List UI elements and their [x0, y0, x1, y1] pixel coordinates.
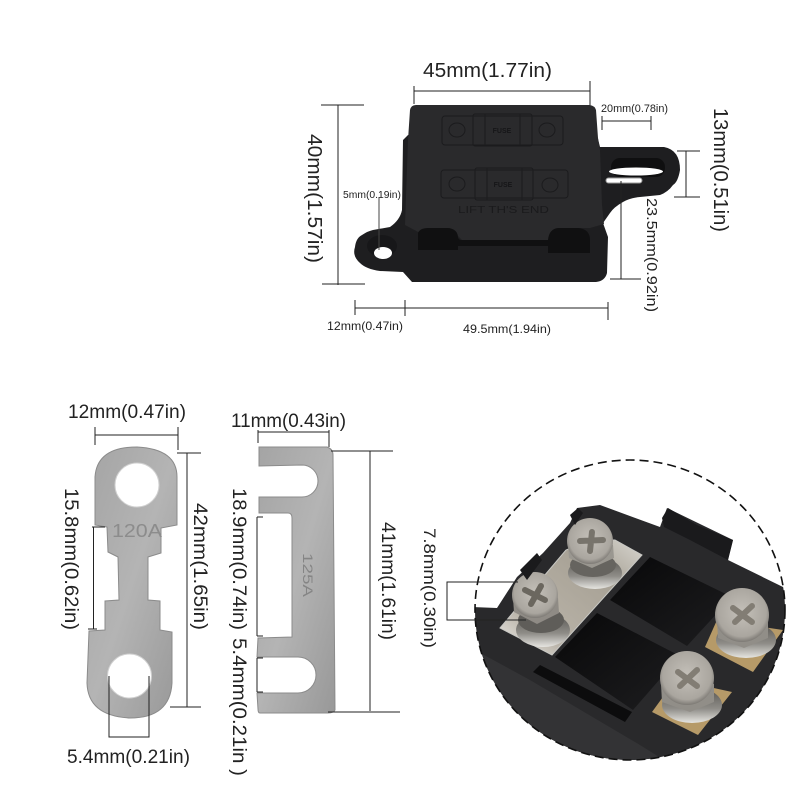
- label: FUSE lower: FUSE: [494, 182, 513, 189]
- right mounting slot: [611, 158, 665, 177]
- stamp 120A: 120A: [112, 521, 162, 541]
- dimension: 11mm fuse width: [231, 411, 346, 447]
- dimension: 18.9mm: 18.9mm(0.74in): [228, 488, 249, 630]
- dimension: 15.8mm: [60, 488, 105, 630]
- screw 1: [512, 572, 570, 647]
- dimension: 20mm slot: 20mm(0.78in): [601, 103, 668, 115]
- dimension: 45mm width: 45mm(1.77in): [423, 60, 552, 82]
- dimension: 23.5mm: 23.5mm(0.92in): [643, 198, 660, 312]
- left tab: [520, 553, 542, 580]
- dimension: 15.8mm: 15.8mm(0.62in): [60, 488, 81, 630]
- dimension: 42mm: [170, 453, 210, 707]
- box lid: [405, 105, 604, 240]
- dimension: 40mm height: [303, 105, 365, 285]
- left mounting hole: [374, 247, 392, 259]
- top-left tab: [570, 508, 583, 525]
- dimension: 42mm: 42mm(1.65in): [189, 503, 210, 630]
- clipped photo content: [475, 505, 785, 760]
- slot highlight: [606, 178, 642, 183]
- dimension: 18.9mm: [228, 488, 263, 636]
- dimension: 13mm ear: 13mm(0.51in): [709, 108, 731, 232]
- brass pad lower: [652, 685, 732, 735]
- top hole: [115, 463, 159, 507]
- dimension: 41mm: 41mm(1.61in): [377, 522, 398, 640]
- bottom hole: [108, 654, 152, 698]
- dimension: 5mm hole: 5mm(0.19in): [343, 190, 401, 201]
- dimension: 5mm hole: [343, 190, 401, 250]
- slot under plate: [533, 665, 632, 722]
- dimension: 49.5mm: [405, 302, 608, 336]
- panel: terminal close-up: [474, 459, 786, 761]
- dimension: 40mm height: 40mm(1.57in): [303, 134, 325, 263]
- brass pad right: [705, 620, 783, 672]
- dimension: 5.4mm hole: [67, 676, 190, 768]
- dimension: 7.8mm screw: [420, 528, 526, 648]
- dimension: 11mm fuse width: 11mm(0.43in): [231, 411, 346, 432]
- ear ring around left hole: [367, 235, 397, 257]
- dashed circle: [475, 460, 785, 760]
- lower well: [555, 613, 680, 710]
- dimension: 41mm: [328, 451, 400, 712]
- dimension: 5.4mm slot: [228, 638, 263, 776]
- lid embossing: upper fuse: [442, 114, 563, 146]
- dimension: 45mm width: [414, 60, 590, 105]
- label: lift this end: LIFT TH'S END: [458, 205, 549, 216]
- dimension: 23.5mm: [610, 181, 660, 312]
- panel: 125A fuse: [257, 447, 335, 713]
- dimension: 20mm slot: [601, 103, 668, 130]
- slot opening: [609, 168, 663, 176]
- lid front shadow and terminal notches: [418, 228, 590, 253]
- screw 3: [715, 588, 776, 658]
- screw 4: [660, 651, 722, 723]
- box base and mounting ears: [354, 135, 680, 282]
- lid embossing: lower fuse: [441, 168, 568, 200]
- dimension: 13mm ear: [674, 108, 731, 232]
- screw 2: [567, 518, 622, 589]
- dimension: 7.8mm screw: 7.8mm(0.30in): [420, 528, 439, 648]
- dimension: 5.4mm slot: 5.4mm(0.21in ): [228, 638, 249, 776]
- dimension: 49.5mm: 49.5mm(1.94in): [463, 322, 551, 336]
- dimension: 12mm ear: 12mm(0.47in): [327, 319, 403, 333]
- nickel plate: [500, 540, 642, 655]
- hinge tab: [662, 508, 733, 560]
- panel: fuse box photo: [354, 105, 680, 282]
- stamp 125A: 125A: [300, 553, 316, 598]
- dimension: 12mm fuse width: 12mm(0.47in): [68, 402, 186, 423]
- dimension: 12mm fuse width: [68, 402, 186, 450]
- label: FUSE upper: FUSE: [493, 128, 512, 135]
- dimension: 12mm ear: [327, 300, 405, 333]
- dimension: 5.4mm hole: 5.4mm(0.21in): [67, 747, 190, 768]
- panel: 120A fuse: [87, 447, 177, 718]
- upper well: [610, 557, 732, 646]
